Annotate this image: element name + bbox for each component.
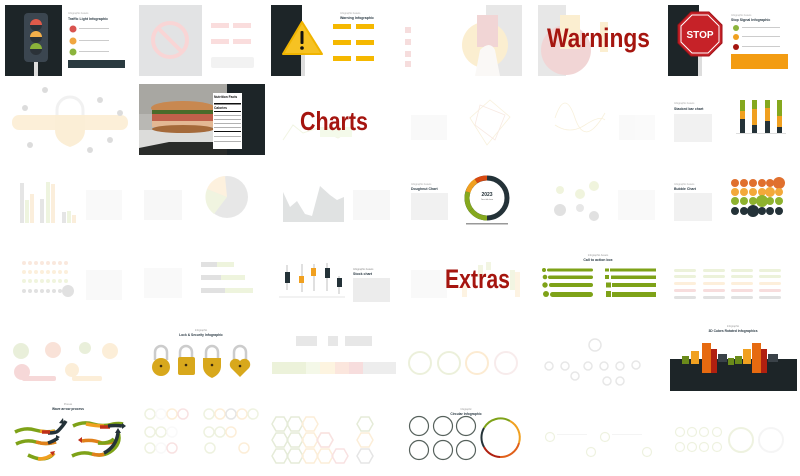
panel: faded hexagon process: [272, 417, 373, 463]
panel: faded yellow card: [538, 5, 608, 76]
panel: wave arrow process: Process: [64, 403, 73, 406]
panel: stock chart: Stock chart: [353, 272, 373, 276]
panel: call to action box: [542, 254, 656, 297]
panel: warning infographic: Warning Infographic: [340, 16, 374, 20]
panel: traffic light infographic: [5, 5, 125, 76]
panel: lock and security infographic: Infographic: [195, 329, 208, 332]
panel: faded area chart: [283, 186, 390, 222]
panel: doughnut chart: [411, 178, 508, 224]
panel: stop signal infographic: Stop Signal Infographic: [731, 18, 770, 22]
panel: stacked bar chart: Stacked bar chart: [674, 107, 704, 111]
panel: call to action box: Call to action box: [583, 258, 613, 262]
panel: doughnut chart: Doughnut Chart: [411, 187, 438, 191]
panel: faded circle process: [145, 409, 258, 453]
panel: bubble chart: [674, 177, 785, 221]
panel: faded lock with bugs: [12, 87, 128, 153]
panel: faded circle header text: [546, 432, 652, 456]
panel: circular infographic: [410, 408, 520, 460]
panel: stacked bar chart: Infographic Assets: [674, 102, 695, 105]
panel: warning infographic: [271, 5, 374, 76]
panel: faded circular arrow infographic: [545, 339, 640, 385]
panel: stacked bar chart: [674, 100, 786, 142]
panel: circular infographic: Circular Infographic: [450, 412, 482, 416]
panel: faded bar chart: [20, 182, 122, 223]
panel: faded radar chart: [411, 100, 510, 145]
panel: stock chart: [279, 263, 390, 302]
panel: call to action box: Infographic Assets: [588, 254, 609, 257]
panel: traffic light infographic: Infographic Assets: [68, 12, 89, 15]
panel: doughnut chart: Infographic Assets: [411, 183, 432, 186]
panel: stop signal infographic: [668, 5, 788, 76]
panel: faded line chart behind Charts: [283, 125, 353, 140]
panel: stop signal infographic: Infographic Assets: [731, 14, 752, 17]
panel: sandwich nutrition photo: Nutrition Facts: [214, 95, 237, 99]
panel: faded red card: [405, 5, 522, 76]
panel: faded pie chart: [144, 176, 248, 220]
panel: faded bubble line chart: [22, 261, 122, 300]
panel: faded call to action pills: [674, 269, 781, 299]
panel: sandwich nutrition photo: [139, 84, 265, 155]
panel: faded waterfall chart behind Extras: [411, 262, 520, 298]
panel: bubble chart: Infographic Assets: [674, 183, 695, 186]
panel: doughnut chart: Your title here: [481, 198, 494, 201]
panel: faded dislike infographic: [139, 5, 254, 76]
panel: faded circle counter: [676, 428, 783, 452]
panel: bubble chart: Bubble Chart: [674, 187, 697, 191]
panel: traffic light infographic: Traffic Light Infographic: [68, 17, 108, 21]
panel: sandwich nutrition photo: Calories: [214, 106, 227, 110]
panel: faded bubble chart: [554, 181, 655, 221]
panel: lock and security infographic: Lock & Security Infographic: [179, 333, 223, 337]
heading: Extras: Extras: [445, 264, 510, 294]
heading: Charts: Charts: [300, 106, 368, 136]
panel: faded horizontal bar chart: [144, 262, 253, 298]
panel: doughnut chart: 2023: [481, 192, 493, 198]
panel: 3D cubes rotated infographics: 3D Cubes Rotated Infographics: [708, 329, 758, 333]
panel: 3D cubes rotated infographics: Infographic: [727, 325, 740, 328]
panel: wave arrow process: Wave arrow process: [52, 407, 84, 411]
heading: Warnings: Warnings: [547, 23, 650, 53]
panel: faded line chart: [555, 103, 655, 140]
panel: faded circle loader: [409, 352, 517, 374]
panel: 3D cubes rotated infographics: [670, 325, 797, 391]
panel: lock and security infographic: [152, 329, 250, 378]
panel: stop signal infographic: STOP: [686, 30, 714, 41]
panel: wave arrow process: [15, 403, 126, 459]
panel: stock chart: Infographic Assets: [353, 268, 374, 271]
panel: faded arrow shapes: [13, 342, 118, 381]
panel: faded puzzle infographic: [272, 336, 396, 374]
panel: warning infographic: Infographic Assets: [340, 12, 361, 15]
panel: circular infographic: Infographic: [460, 408, 473, 411]
